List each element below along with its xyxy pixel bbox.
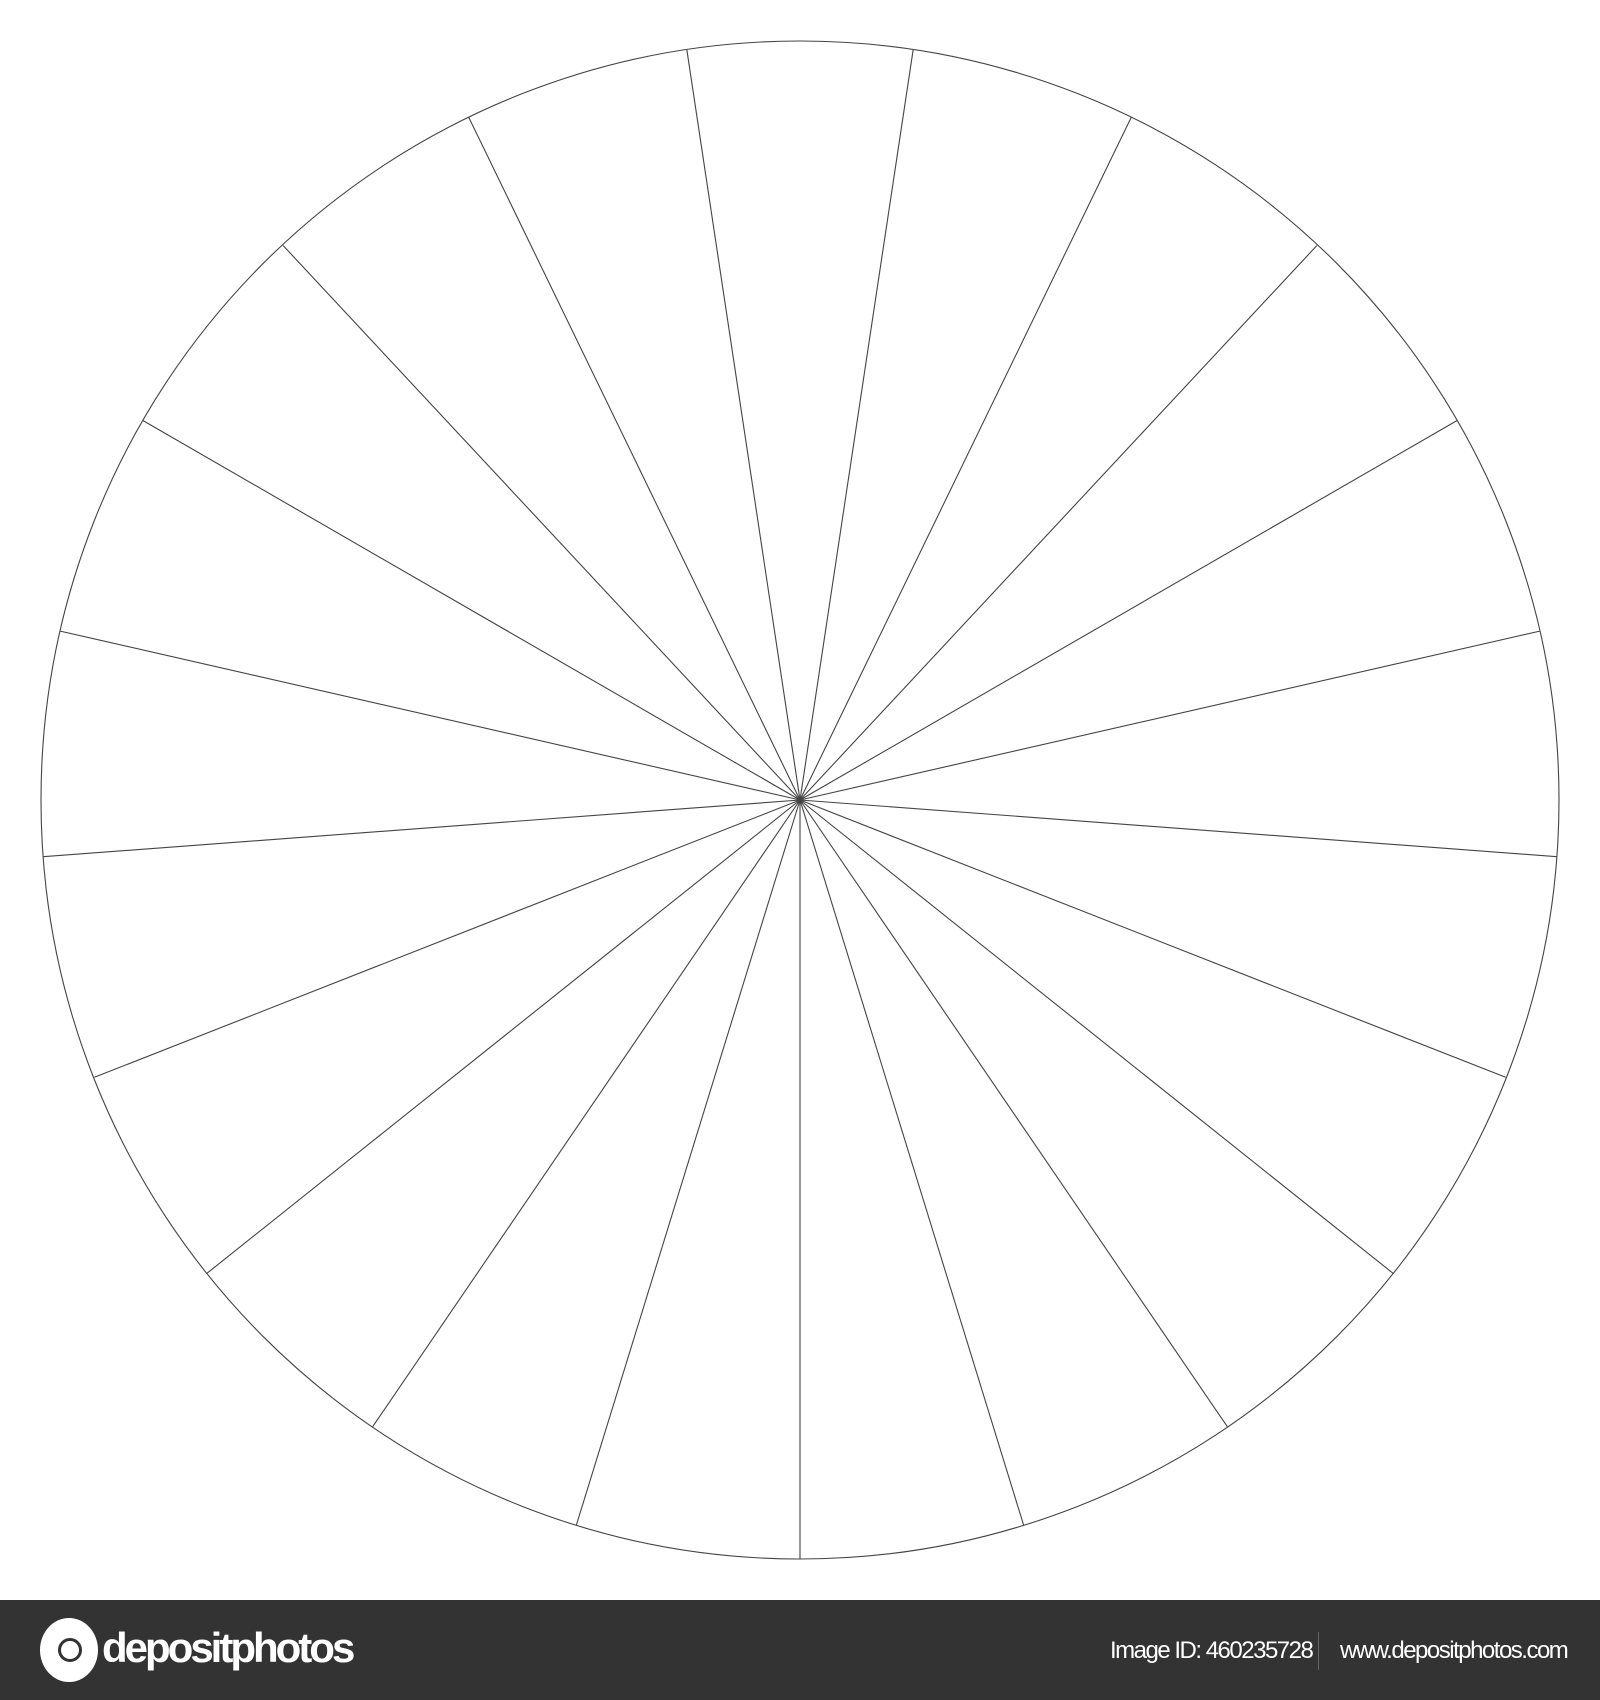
icon: camera logo (40, 1618, 98, 1682)
footer bar (0, 1600, 1600, 1700)
image id text: Image ID: 460235728 (1110, 1637, 1312, 1664)
website text: www.depositphotos.com (1340, 1637, 1567, 1664)
logo text: depositphotos (102, 1624, 352, 1671)
